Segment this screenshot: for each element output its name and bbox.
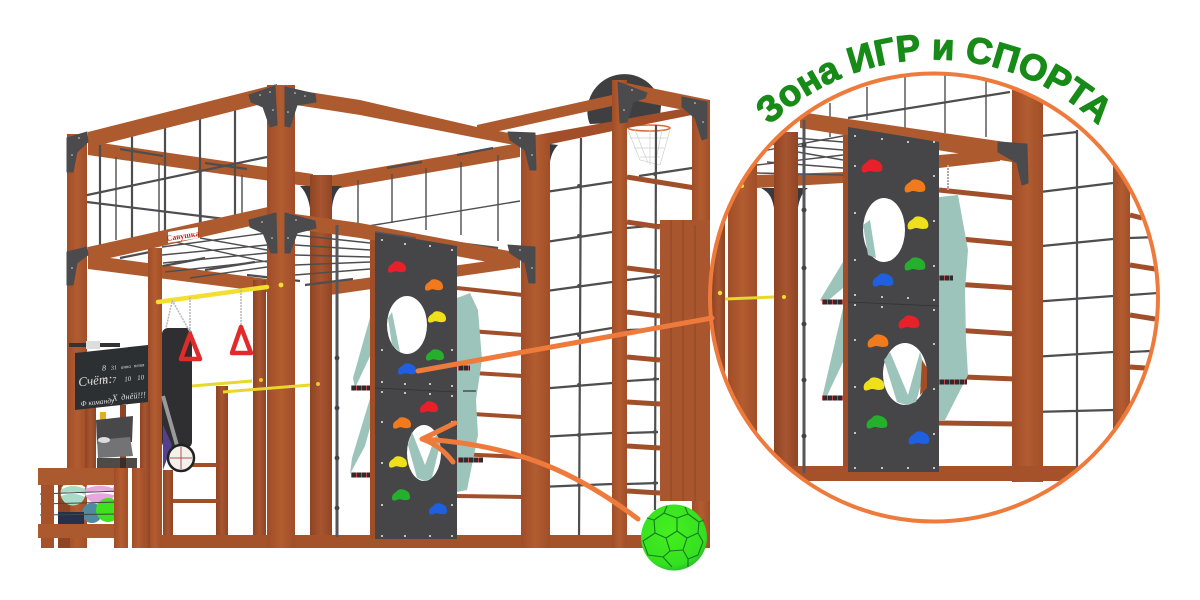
magnifier circle: zoomed climbing wall [710, 70, 1158, 522]
rungs of small ladder [173, 465, 218, 501]
hammock right part [457, 293, 483, 492]
scoreboard: 7 [112, 375, 118, 385]
scooter [163, 396, 194, 471]
zoomed climbing panel [843, 127, 939, 472]
scoreboard: 10 [124, 375, 132, 383]
arrow: straight line from hold to circle [418, 318, 712, 371]
climbing holds [388, 261, 447, 515]
scoreboard: X [111, 392, 119, 403]
scoreboard: 8 [101, 363, 106, 373]
scoreboard: 10 [137, 373, 145, 382]
front wooden frame [67, 80, 710, 548]
posts behind scoreboard [85, 400, 150, 548]
scoreboard: петя [134, 363, 145, 369]
punching bag [162, 328, 192, 448]
right rope net [539, 125, 692, 540]
zoomed back beams [757, 112, 1012, 188]
scoreboard: Ф команду [80, 396, 115, 408]
sign: Савушка: Савушка [166, 229, 200, 243]
gymnastic rings [166, 290, 251, 359]
horizontal roof net [120, 233, 370, 285]
scoreboard: 31 [110, 365, 117, 372]
back wooden beams [88, 95, 692, 536]
title on an arc: Зона ИГР и СПОРТА [756, 34, 1108, 126]
handle bar behind scoreboard [69, 341, 120, 349]
climbing rope [335, 225, 339, 537]
zoomed roof net [757, 135, 843, 175]
metal corner brackets [67, 82, 707, 285]
yellow pull-up bars [158, 283, 320, 392]
wall bars between panel and post [457, 288, 523, 497]
middle rope net [332, 148, 520, 258]
climbing wall panel [370, 232, 457, 539]
hammock left part [350, 300, 375, 475]
zoomed yellow bar [718, 184, 786, 299]
crate of balls [38, 468, 145, 548]
playground structure [38, 74, 710, 548]
icon: green soccer ball [641, 504, 707, 570]
lower oval hole [407, 425, 441, 481]
zoomed wooden posts [712, 70, 1130, 482]
zoomed climbing rope [802, 120, 806, 473]
scoreboard: днёй!!! [121, 389, 147, 402]
zoomed wall bars [939, 190, 1155, 424]
left rope net [78, 100, 267, 248]
zoomed nets [830, 70, 1158, 467]
basketball backboard and hoop [587, 74, 670, 165]
scoreboard: Счёт: [77, 371, 113, 389]
scoreboard [75, 345, 149, 410]
arrow: curved from ball to hole [422, 423, 638, 519]
storage organizer [96, 412, 137, 468]
zoomed bracket [998, 142, 1028, 185]
upper oval hole [387, 296, 427, 354]
wall bars of right ladder [627, 177, 695, 493]
scoreboard: анна [121, 365, 132, 371]
scoreboard: 5 [103, 376, 108, 386]
wooden plank panel [660, 220, 710, 501]
zoomed hammock [820, 165, 968, 420]
